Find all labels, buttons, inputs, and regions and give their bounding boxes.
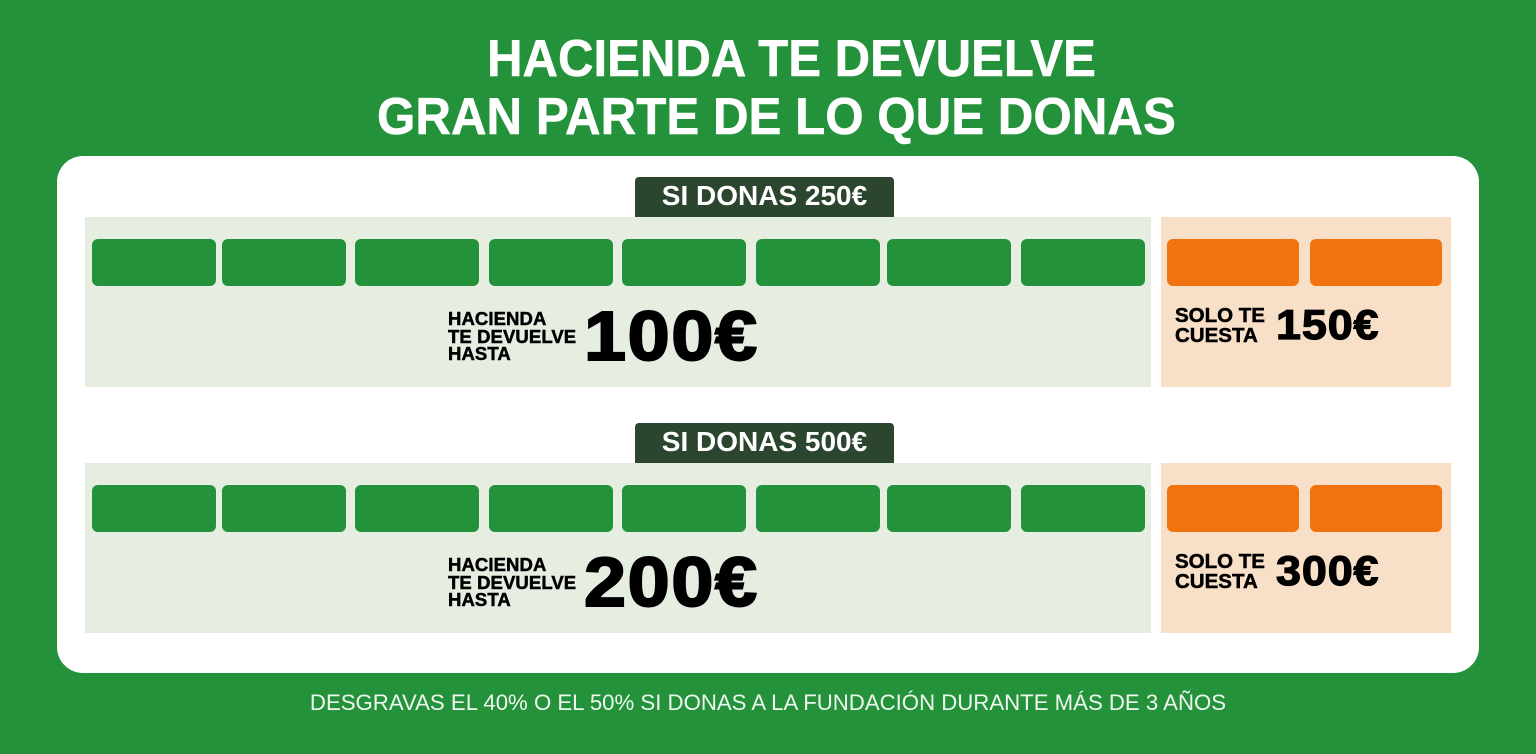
title: GRAN PARTE DE LO QUE DONAS bbox=[377, 88, 1176, 146]
label: solo te cuesta: SOLO TE bbox=[1175, 550, 1265, 573]
white card bbox=[57, 156, 1479, 673]
label: hacienda te devuelve hasta: TE DEVUELVE bbox=[448, 572, 576, 592]
amount: 300: 300€ bbox=[1276, 547, 1379, 594]
amount: 150: 150€ bbox=[1276, 301, 1379, 348]
label: solo te cuesta: CUESTA bbox=[1175, 570, 1258, 592]
label: hacienda te devuelve hasta bbox=[448, 554, 576, 610]
label: hacienda te devuelve hasta: HACIENDA bbox=[448, 554, 546, 575]
tab: si donas 500 bbox=[635, 423, 894, 463]
label: solo te cuesta: SOLO TE bbox=[1175, 304, 1265, 327]
label: hacienda te devuelve hasta: HACIENDA bbox=[448, 308, 546, 329]
footnote: DESGRAVAS EL 40% O EL 50% SI DONAS A LA FUNDACIÓN DURANTE MÁS DE 3 AÑOS bbox=[310, 690, 1226, 715]
tab: si donas 500: SI DONAS 500€ bbox=[662, 426, 867, 457]
title: HACIENDA TE DEVUELVE bbox=[487, 30, 1096, 88]
label: solo te cuesta: CUESTA bbox=[1175, 324, 1258, 346]
label: hacienda te devuelve hasta: HASTA bbox=[448, 343, 511, 364]
label: solo te cuesta bbox=[1175, 550, 1265, 592]
label: solo te cuesta bbox=[1175, 304, 1265, 346]
tab: si donas 250: SI DONAS 250€ bbox=[662, 180, 867, 211]
label: hacienda te devuelve hasta bbox=[448, 308, 576, 364]
amount: 200: 200€ bbox=[584, 543, 759, 621]
tab: si donas 250 bbox=[635, 177, 894, 217]
panel: Hacienda devuelve 100 bbox=[85, 217, 1151, 387]
title bbox=[377, 30, 1176, 146]
panel: solo te cuesta 300 bbox=[1161, 463, 1451, 633]
label: hacienda te devuelve hasta: HASTA bbox=[448, 589, 511, 610]
panel: solo te cuesta 150 bbox=[1161, 217, 1451, 387]
label: hacienda te devuelve hasta: TE DEVUELVE bbox=[448, 326, 576, 346]
panel: Hacienda devuelve 200 bbox=[85, 463, 1151, 633]
amount: 100: 100€ bbox=[584, 297, 759, 375]
